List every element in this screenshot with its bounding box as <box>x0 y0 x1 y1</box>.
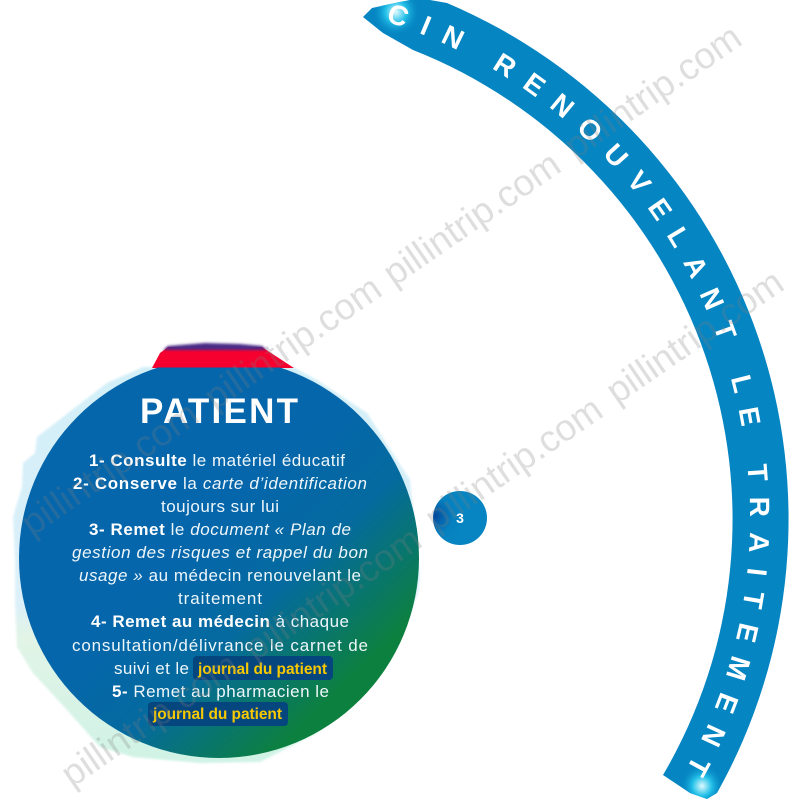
gradient disc <box>19 358 419 758</box>
instruction list: 4- Remet au médecin à chaque <box>91 612 349 631</box>
instruction list: gestion des risques et rappel du bon <box>72 543 368 562</box>
arc band shape <box>363 0 789 799</box>
instruction list: 5- Remet au pharmacien le <box>112 682 329 701</box>
arc banner: médecin renouvelant le traitement <box>363 0 789 799</box>
step number badge <box>433 491 487 545</box>
instruction list: 1- Consulte le matériel éducatif <box>89 451 345 470</box>
highlight: journal du patient (step 4): journal du patient <box>197 661 327 678</box>
step number badge: 3 <box>456 510 464 526</box>
watermark: pillintrip.com <box>375 143 568 294</box>
watermark: pillintrip.com <box>196 267 389 418</box>
panel: patient disc <box>13 343 420 763</box>
instruction list: 2- Conserve la carte d’identification <box>73 474 367 493</box>
watermark: pillintrip.com <box>598 261 791 412</box>
arc end glows <box>372 0 724 800</box>
highlight: journal du patient (step 4) <box>193 656 333 680</box>
instruction list <box>72 451 368 701</box>
highlight: journal du patient (step 5) <box>148 702 288 726</box>
instruction list: toujours sur lui <box>161 497 279 516</box>
instruction list: traitement <box>178 589 262 608</box>
watermark: pillintrip.com <box>53 644 246 795</box>
watermark: pillintrip.com <box>13 393 206 544</box>
instruction list: 3- Remet le document « Plan de <box>89 520 351 539</box>
pale irregular halo <box>13 367 420 763</box>
watermark: pillintrip.com <box>556 16 749 167</box>
heading: PATIENT <box>140 392 298 431</box>
watermark: pillintrip.com <box>417 388 610 539</box>
arc text: CIN RENOUVELANT LE TRAITEMENT <box>388 5 770 778</box>
highlight: journal du patient (step 5): journal du patient <box>152 706 282 723</box>
instruction list: suivi et le <box>114 659 189 678</box>
instruction list: usage » au médecin renouvelant le <box>79 566 361 585</box>
instruction list: consultation/délivrance le carnet de <box>72 636 368 655</box>
watermark: pillintrip.com <box>236 518 429 669</box>
red tab on top of disc <box>152 343 294 368</box>
